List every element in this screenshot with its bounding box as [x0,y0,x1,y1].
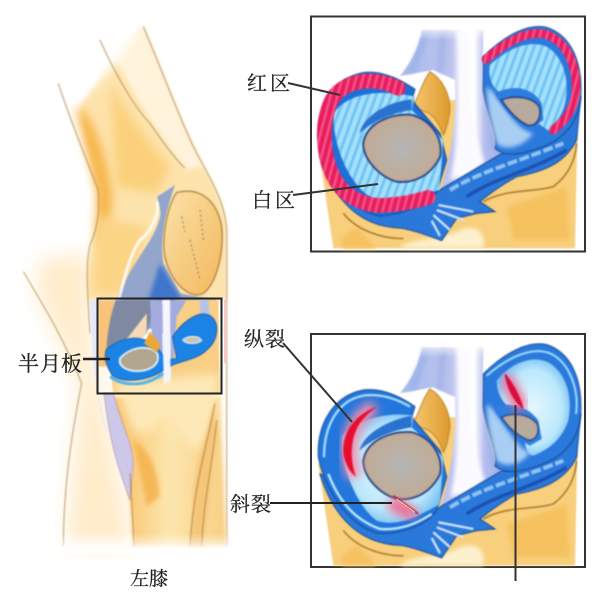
label: oblique tear: 裂 [251,493,271,516]
longitudinal tear [343,407,377,477]
thigh outlines [23,27,227,547]
radial tear [505,375,523,409]
label: white zone: 区 [275,189,295,212]
label: red zone: 区 [270,72,290,95]
label: red zone: 红 [247,72,267,95]
left meniscus body [318,72,447,216]
panel: blood supply zones [311,16,585,252]
label: white zone [252,184,378,212]
label: oblique tear [230,493,392,516]
panel frame [311,16,585,252]
label: meniscus [18,352,110,376]
shin [112,397,227,547]
thigh [80,28,227,300]
arrow: radial tear leader line [514,405,516,581]
label: meniscus: 半 [18,352,39,376]
label: white zone: 白 [252,189,272,212]
knee locator box [98,298,222,394]
femur blue-grey shadow [115,185,217,333]
label: meniscus: 月 [40,352,61,376]
label: oblique tear: 斜 [230,493,250,516]
label: longitudinal tear: 纵 [244,328,264,351]
calf soft tissue [37,253,133,547]
label: longitudinal tear [244,328,352,422]
knee illustration [23,13,250,553]
meniscus drawing with tears [318,341,581,566]
small meniscus [105,314,217,380]
oblique tear [390,496,418,516]
box interior femur and side [98,300,115,367]
left meniscus body [318,390,447,533]
meniscus drawing with red and white zones [318,23,581,248]
label: meniscus: 板 [61,352,82,376]
right meniscus body [483,26,581,154]
patella [164,191,222,295]
label: longitudinal tear: 裂 [265,328,285,351]
shin lines [130,403,217,547]
right meniscus body [483,344,581,471]
caption: left knee: 左膝 [130,568,168,590]
panel: tear types [311,334,585,567]
label: red zone [247,72,340,95]
panel frame [311,334,585,567]
